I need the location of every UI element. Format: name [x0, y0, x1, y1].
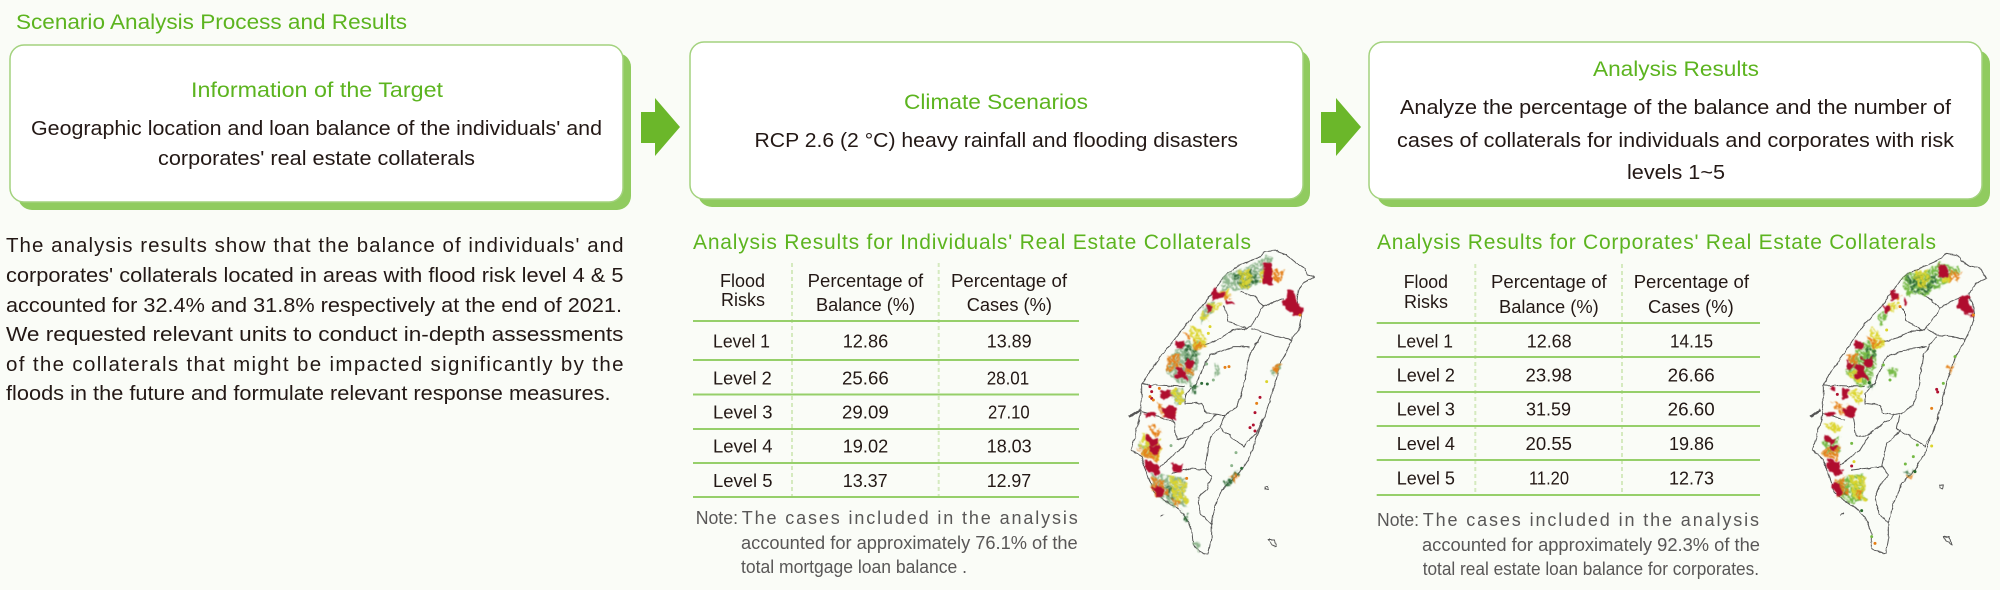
row: level 5: 12.73 [1669, 467, 1714, 488]
table header row: Cases (%) [967, 294, 1052, 315]
row: level 5: 11.20 [1529, 467, 1569, 488]
row: level 1: 13.89 [987, 330, 1032, 351]
flood risk dots: level 4 [1138, 268, 1287, 511]
heading: individuals table: Analysis Results for Individuals' Real Estate Collaterals [693, 231, 1251, 254]
table header row [1404, 271, 1750, 317]
note: individuals table: The cases included in the analysis [742, 508, 1078, 528]
text block: analysis summary: corporates' collaterals located in areas with flood risk level 4 & 5 [6, 264, 624, 287]
heading: corporates table: Analysis Results for Corporates' Real Estate Collaterals [1377, 231, 1936, 254]
row: level 2: 26.66 [1668, 365, 1715, 386]
text block: analysis summary: floods in the future and formulate relevant response measures. [6, 382, 610, 405]
note: individuals table [696, 508, 1078, 577]
text block: analysis summary: of the collaterals that might be impacted significantly by the [6, 353, 623, 376]
map: individuals' collateral flood risk [1129, 251, 1315, 555]
panel: information of the target [10, 45, 631, 210]
flood risk dots: level 4 [1820, 271, 1962, 502]
row: level 2: Level 2 [1397, 365, 1455, 386]
row: level 5: 12.97 [987, 470, 1031, 491]
flood risk dots: level 3 [1823, 269, 1953, 501]
table header row: Flood [1404, 271, 1448, 292]
row: level 3: Level 3 [1397, 399, 1455, 420]
panel: information of the target: Information of the Target [191, 79, 443, 102]
row: level 3: 26.60 [1668, 399, 1715, 420]
note: corporates table: Note: [1377, 510, 1419, 530]
panel: analysis results: cases of collaterals for individuals and corporates with risk [1397, 129, 1955, 152]
panel: analysis results: Analysis Results [1593, 58, 1759, 81]
text block: analysis summary: We requested relevant units to conduct in-depth assessments [6, 323, 624, 346]
flood risk dots: level 5 [1145, 262, 1301, 497]
note: corporates table: The cases included in the analysis [1423, 510, 1759, 530]
table header row: Percentage of [808, 270, 924, 291]
table header row: Risks [721, 289, 765, 310]
row: level 1: 12.86 [843, 330, 888, 351]
note: individuals table: total mortgage loan balance . [741, 557, 967, 577]
row: level 2 [1397, 365, 1715, 386]
row: level 3: 29.09 [842, 401, 889, 422]
flood risk dots: level 1 [1140, 253, 1280, 553]
row: level 3: 27.10 [988, 401, 1030, 422]
table header row: Balance (%) [816, 294, 915, 315]
table header row: Percentage of [951, 270, 1068, 291]
panel: analysis results: Analyze the percentage of the balance and the number of [1400, 96, 1951, 119]
row: level 3 [713, 401, 1030, 422]
row: level 2: 25.66 [842, 367, 889, 388]
title: Scenario Analysis Process and Results [16, 11, 407, 34]
row: level 2: Level 2 [713, 367, 772, 388]
row: level 4: 18.03 [987, 436, 1032, 457]
row: level 1 [713, 330, 1032, 351]
note: individuals table: Note: [696, 508, 738, 528]
panel: analysis results [1369, 42, 1990, 207]
row: level 3 [1397, 399, 1715, 420]
row: level 1 [1397, 330, 1713, 351]
row: level 4: Level 4 [1397, 433, 1455, 454]
row: level 1: Level 1 [713, 330, 770, 351]
panel: information of the target: Geographic location and loan balance of the individuals' and [31, 117, 602, 140]
panel: climate scenarios [690, 42, 1310, 207]
arrow: target to scenarios [641, 98, 680, 156]
note: corporates table: total real estate loan balance for corporates. [1423, 559, 1759, 579]
table: individuals' real estate collaterals [693, 263, 1079, 497]
row: level 4: 19.86 [1669, 433, 1714, 454]
table header row [720, 270, 1068, 315]
row: level 3: 31.59 [1526, 399, 1571, 420]
table header row: Cases (%) [1648, 296, 1734, 317]
row: level 1: 12.68 [1527, 330, 1572, 351]
text block: analysis summary [6, 234, 624, 405]
panel: climate scenarios: Climate Scenarios [904, 91, 1088, 114]
text block: analysis summary: The analysis results show that the balance of individuals' and [6, 234, 623, 257]
row: level 2 [713, 367, 1029, 388]
note: individuals table: accounted for approximately 76.1% of the [741, 533, 1078, 553]
row: level 2: 23.98 [1526, 365, 1572, 386]
table header row: Risks [1404, 291, 1448, 312]
arrow: scenarios to results [1321, 98, 1361, 156]
panel: information of the target: corporates' real estate collaterals [158, 147, 475, 170]
text block: analysis summary: accounted for 32.4% and 31.8% respectively at the end of 2021. [6, 294, 622, 317]
flood risk dots: level 3 [1142, 268, 1267, 503]
flood risk dots: level 2 [1838, 273, 1937, 497]
note: corporates table [1377, 510, 1760, 579]
flood risk dots: level 1 [1823, 262, 1960, 503]
row: level 5 [713, 470, 1031, 491]
table: corporates' real estate collaterals [1377, 264, 1760, 495]
row: level 1: 14.15 [1670, 330, 1713, 351]
scattered single dots [1837, 307, 1973, 543]
table header row: Balance (%) [1499, 296, 1599, 317]
row: level 4: Level 4 [713, 436, 772, 457]
table header row: Flood [720, 270, 765, 291]
row: level 5 [1397, 467, 1714, 488]
panel: analysis results: levels 1~5 [1627, 161, 1725, 184]
note: corporates table: accounted for approximately 92.3% of the [1422, 535, 1760, 555]
row: level 4 [713, 436, 1032, 457]
map: corporates' collateral flood risk [1811, 253, 1987, 553]
map outline: Taiwan [1129, 251, 1315, 555]
row: level 4: 19.02 [843, 436, 888, 457]
row: level 1: Level 1 [1397, 330, 1453, 351]
scattered single dots [1150, 315, 1300, 478]
table header row: Percentage of [1634, 271, 1750, 292]
map outline: Taiwan [1811, 253, 1987, 553]
row: level 3: Level 3 [713, 401, 772, 422]
flood risk dots: level 2 [1165, 272, 1258, 527]
row: level 5: Level 5 [713, 470, 772, 491]
row: level 2: 28.01 [987, 367, 1029, 388]
row: level 4 [1397, 433, 1714, 454]
row: level 4: 20.55 [1526, 433, 1572, 454]
table header row: Percentage of [1491, 271, 1608, 292]
row: level 5: Level 5 [1397, 467, 1455, 488]
panel: climate scenarios: RCP 2.6 (2 °C) heavy rainfall and flooding disasters [754, 129, 1238, 152]
row: level 5: 13.37 [843, 470, 888, 491]
flood risk dots: level 5 [1825, 265, 1974, 494]
